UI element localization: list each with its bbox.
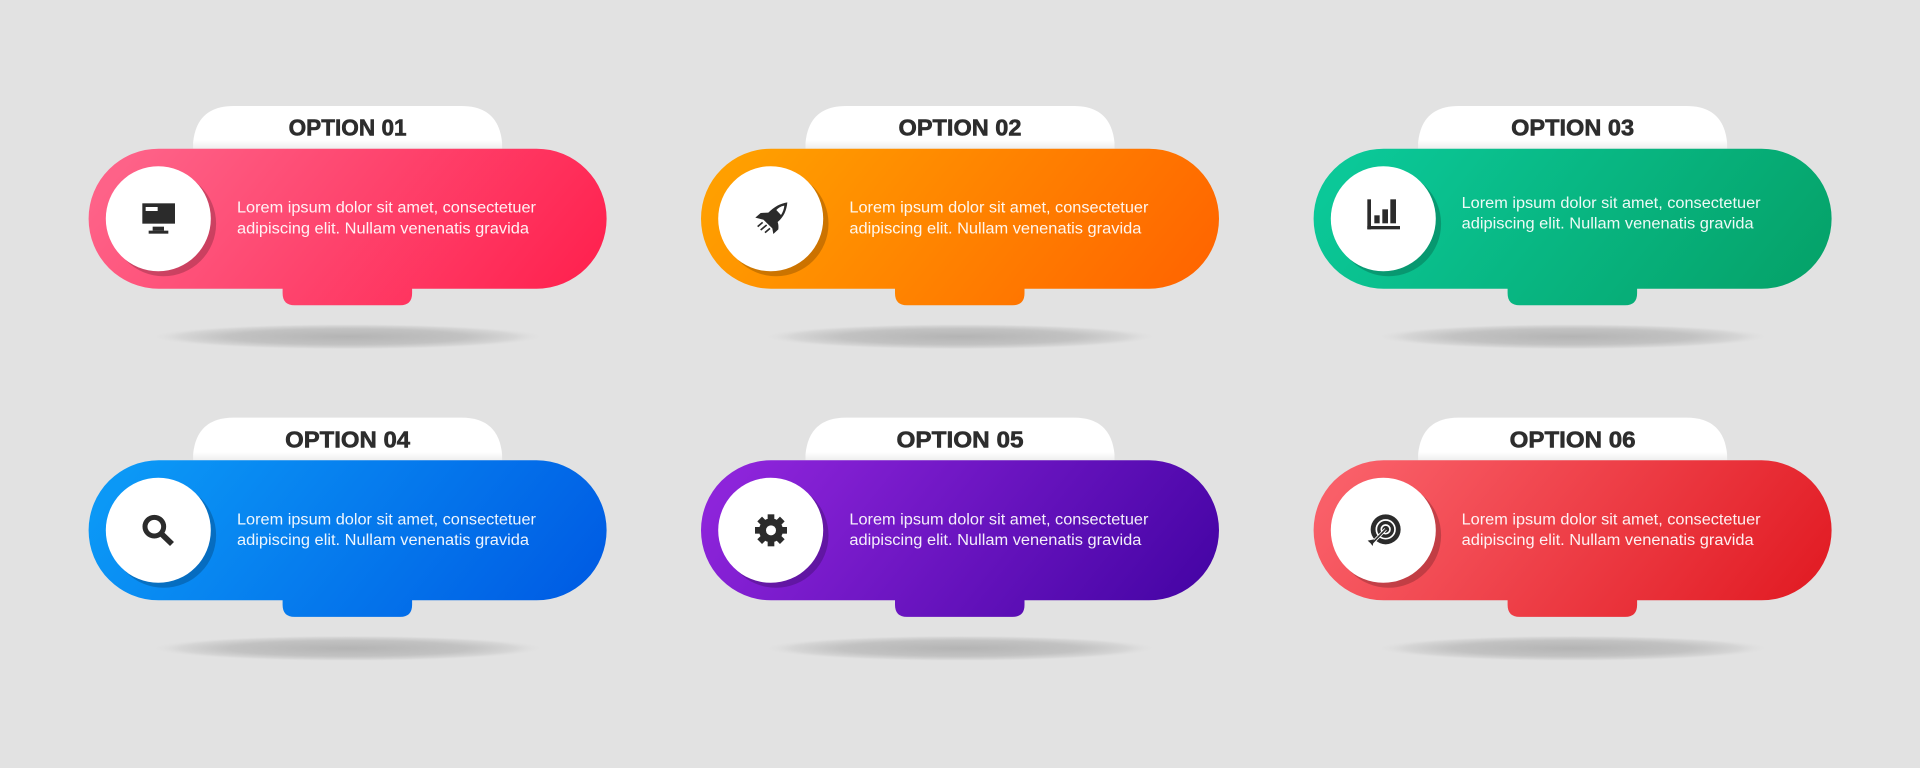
panel: option 01 bbox=[89, 106, 607, 350]
icon: target with arrow bbox=[1368, 514, 1401, 546]
panel: option 05 bbox=[701, 418, 1219, 661]
description text: Lorem ipsum dolor sit amet, consectetuer bbox=[849, 511, 1148, 528]
icon: rocket bbox=[755, 202, 787, 234]
panel: option 03 bbox=[1314, 106, 1832, 350]
floor shadow bbox=[1375, 635, 1771, 661]
gradient pill with bottom tab bbox=[701, 149, 1219, 305]
icon circle bbox=[1331, 478, 1436, 583]
heading tab bbox=[193, 418, 502, 460]
heading: OPTION 01 bbox=[289, 115, 407, 141]
icon: magnifying glass bbox=[145, 517, 172, 544]
icon: monitor bbox=[142, 203, 175, 234]
description text: Lorem ipsum dolor sit amet, consectetuer bbox=[237, 511, 536, 528]
panel: option 02 bbox=[701, 106, 1219, 350]
floor shadow bbox=[762, 324, 1158, 350]
description text: adipiscing elit. Nullam venenatis gravida bbox=[849, 220, 1142, 237]
heading tab bbox=[806, 106, 1114, 149]
circle shadow bbox=[111, 171, 216, 276]
description text: Lorem ipsum dolor sit amet, consectetuer bbox=[849, 200, 1148, 217]
floor shadow bbox=[1375, 324, 1771, 350]
heading tab bbox=[1418, 418, 1727, 460]
circle shadow bbox=[724, 483, 828, 588]
circle shadow bbox=[111, 483, 216, 588]
circle shadow bbox=[1336, 483, 1441, 588]
heading: OPTION 06 bbox=[1510, 426, 1636, 452]
gradient pill with bottom tab bbox=[89, 149, 607, 305]
floor shadow bbox=[150, 635, 546, 661]
description text: Lorem ipsum dolor sit amet, consectetuer bbox=[1462, 511, 1761, 528]
description text: adipiscing elit. Nullam venenatis gravida bbox=[1462, 532, 1754, 549]
gradient pill with bottom tab bbox=[701, 460, 1219, 617]
heading tab bbox=[1418, 106, 1727, 149]
heading: OPTION 03 bbox=[1511, 115, 1634, 141]
icon circle bbox=[718, 166, 823, 271]
icon circle bbox=[718, 478, 823, 583]
description text: adipiscing elit. Nullam venenatis gravida bbox=[237, 532, 529, 549]
floor shadow bbox=[762, 635, 1158, 661]
heading tab bbox=[193, 106, 502, 149]
description text: adipiscing elit. Nullam venenatis gravida bbox=[237, 220, 529, 237]
icon: bar chart bbox=[1367, 199, 1400, 229]
description text: adipiscing elit. Nullam venenatis gravida bbox=[1462, 216, 1754, 233]
description text: Lorem ipsum dolor sit amet, consectetuer bbox=[1462, 195, 1761, 212]
description text: adipiscing elit. Nullam venenatis gravida bbox=[849, 532, 1142, 549]
heading: OPTION 04 bbox=[285, 426, 410, 452]
panel: option 04 bbox=[89, 418, 607, 661]
panel: option 06 bbox=[1314, 418, 1832, 661]
gradient pill with bottom tab bbox=[89, 460, 607, 617]
floor shadow bbox=[150, 324, 546, 350]
circle shadow bbox=[724, 171, 828, 276]
heading: OPTION 02 bbox=[898, 115, 1022, 141]
icon circle bbox=[106, 166, 211, 271]
heading: OPTION 05 bbox=[896, 426, 1024, 452]
gradient pill with bottom tab bbox=[1314, 149, 1832, 305]
circle shadow bbox=[1336, 171, 1441, 276]
gradient pill with bottom tab bbox=[1314, 460, 1832, 617]
heading tab bbox=[806, 418, 1114, 460]
icon circle bbox=[1331, 166, 1436, 271]
icon circle bbox=[106, 478, 211, 583]
description text: Lorem ipsum dolor sit amet, consectetuer bbox=[237, 200, 536, 217]
icon: gear bbox=[755, 514, 787, 546]
